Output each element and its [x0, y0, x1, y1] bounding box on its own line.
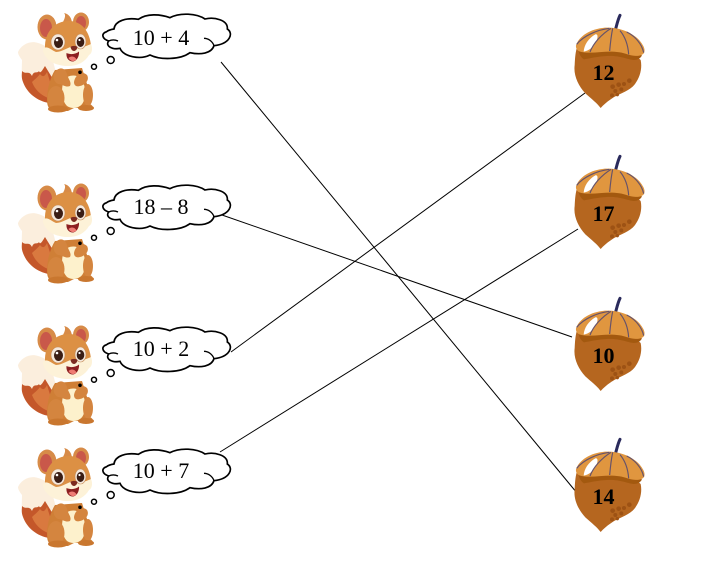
acorn: 10: [574, 298, 645, 391]
squirrel with thought bubble: 10 + 7: [18, 448, 230, 548]
acorn: 12: [574, 15, 645, 108]
acorn: 12: 12: [592, 60, 614, 85]
acorn: 17: 17: [592, 201, 614, 226]
squirrel with thought bubble: 10 + 2: [18, 326, 230, 426]
squirrel with thought bubble: 10 + 7: 10 + 7: [133, 458, 189, 483]
acorn: 14: 14: [592, 484, 614, 509]
squirrel with thought bubble: 10 + 2: 10 + 2: [133, 336, 189, 361]
squirrel with thought bubble: 18 - 8: [18, 184, 230, 284]
connecting line: 18 - 8 to 10: [222, 215, 572, 337]
squirrel with thought bubble: 18 - 8: 18 – 8: [134, 194, 188, 219]
connecting line: 10 + 4 to 14: [221, 62, 577, 493]
acorn: 10: 10: [592, 343, 614, 368]
connecting line: 10 + 2 to 12: [231, 93, 585, 352]
squirrel with thought bubble: 10 + 4: [18, 12, 230, 112]
acorn: 17: [574, 156, 645, 249]
connecting line: 10 + 7 to 17: [220, 229, 578, 452]
acorn: 14: [574, 439, 645, 532]
squirrel with thought bubble: 10 + 4: 10 + 4: [133, 25, 189, 50]
